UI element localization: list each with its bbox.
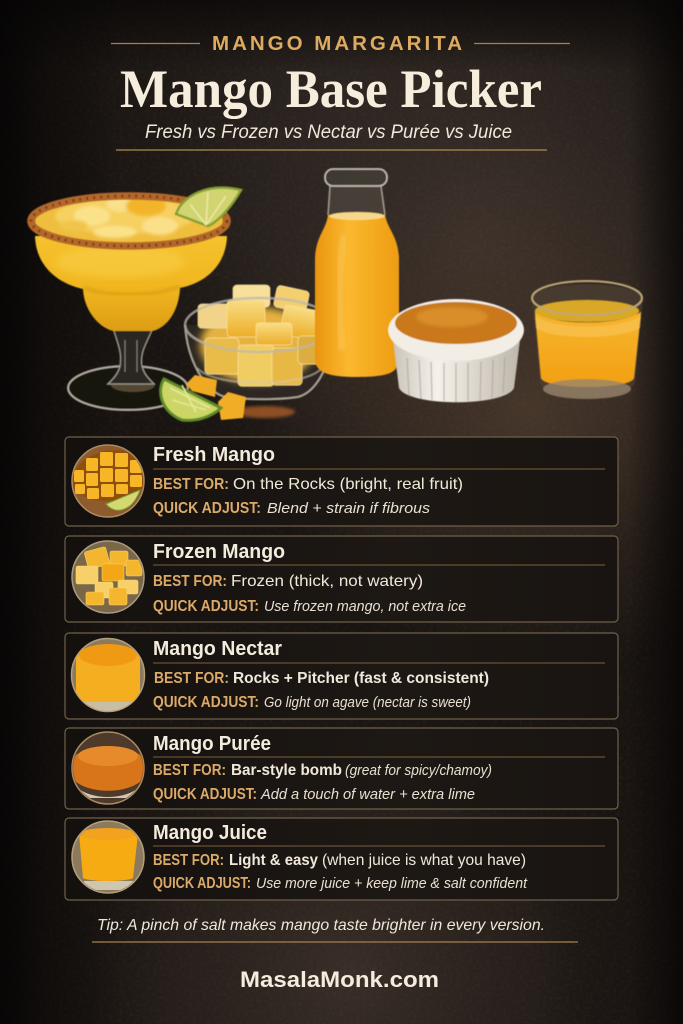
quick adjust (153, 598, 466, 615)
eyebrow heading: MANGO MARGARITA (212, 32, 462, 55)
subtitle: Fresh vs Frozen vs Nectar vs Purée vs Juice (145, 122, 512, 143)
name: Mango Juice (153, 822, 267, 844)
icon: glass of puree (72, 732, 144, 804)
quick adjust (153, 786, 475, 803)
best for (153, 762, 492, 779)
best for: BEST FOR: (153, 762, 226, 779)
panel: mango puree (65, 728, 618, 809)
quick adjust (153, 875, 528, 892)
hero: margarita glass (31, 188, 241, 410)
quick adjust: Use more juice + keep lime & salt confident (256, 875, 528, 892)
quick adjust: Add a touch of water + extra lime (260, 786, 475, 803)
quick adjust: Go light on agave (nectar is sweet) (264, 694, 471, 711)
best for: Rocks + Pitcher (fast & consistent) (233, 670, 489, 687)
best for: Light & easy (229, 852, 318, 869)
best for: Frozen (thick, not watery) (231, 573, 423, 590)
hero: bottle of mango nectar (315, 169, 399, 377)
best for: BEST FOR: (153, 852, 224, 869)
best for: Bar-style bomb (231, 762, 342, 779)
hero: bowl of frozen mango cubes (185, 285, 335, 399)
quick adjust: Blend + strain if fibrous (267, 500, 431, 517)
header (111, 32, 570, 150)
lime slice on rim (176, 188, 241, 226)
quick adjust: Use frozen mango, not extra ice (264, 598, 466, 615)
name: Frozen Mango (153, 541, 285, 563)
name: Mango Nectar (153, 638, 282, 660)
icon: glass of juice (72, 821, 144, 893)
panel: frozen mango (65, 536, 618, 622)
quick adjust: QUICK ADJUST: (153, 875, 251, 892)
best for: (when juice is what you have) (322, 852, 526, 869)
best for (153, 573, 423, 590)
hero: cut lime and mango cubes with spice (161, 375, 295, 420)
quick adjust: QUICK ADJUST: (153, 694, 259, 711)
icon: cubed mango with lime (72, 445, 145, 517)
name: Mango Purée (153, 733, 271, 755)
hero: ramekin of mango puree (388, 299, 524, 402)
panel: mango nectar (65, 633, 618, 719)
tip: Tip: A pinch of salt makes mango taste brighter in every version. (97, 917, 545, 934)
icon: glass of nectar (72, 638, 144, 712)
panel: mango juice (65, 818, 618, 900)
icon: bowl of frozen cubes (72, 541, 144, 613)
best for: (great for spicy/chamoy) (345, 762, 492, 779)
best for: BEST FOR: (154, 670, 229, 687)
title: Mango Base Picker (120, 59, 542, 119)
hero: glass of mango juice (532, 281, 643, 399)
best for: BEST FOR: (153, 476, 229, 493)
quick adjust (153, 694, 471, 711)
best for: On the Rocks (bright, real fruit) (233, 476, 463, 493)
best for (153, 852, 526, 869)
best for: BEST FOR: (153, 573, 227, 590)
footer brand: MasalaMonk.com (240, 967, 439, 992)
quick adjust: QUICK ADJUST: (153, 786, 257, 803)
quick adjust: QUICK ADJUST: (153, 598, 259, 615)
name: Fresh Mango (153, 444, 275, 466)
quick adjust: QUICK ADJUST: (153, 500, 261, 517)
panel: fresh mango (65, 437, 618, 526)
quick adjust (153, 500, 431, 517)
